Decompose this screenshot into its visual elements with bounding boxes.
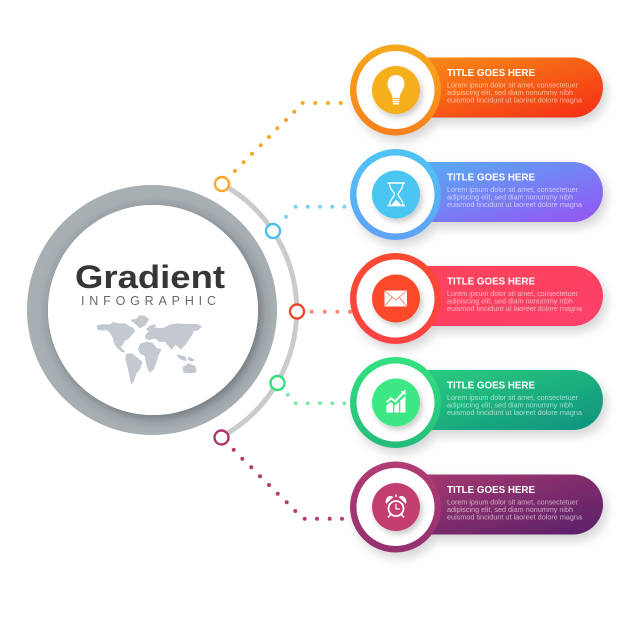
world map <box>97 316 201 383</box>
card 5 body: Lorem ipsum dolor sit amet, consectetuer <box>447 497 579 506</box>
panel: card 1 orange <box>350 44 603 136</box>
node: blue <box>266 224 280 238</box>
connector arc <box>221 184 297 437</box>
card 3 body <box>447 289 583 313</box>
card 1 body: Lorem ipsum dolor sit amet, consectetuer <box>447 80 579 89</box>
card 4 body: adipiscing elit, sed diam nonummy nibh <box>447 400 573 410</box>
card 5 title: TITLE GOES HERE <box>447 485 535 496</box>
icon: envelope <box>384 290 407 306</box>
dotted connector: blue <box>284 205 346 219</box>
card 2 body: Lorem ipsum dolor sit amet, consectetuer <box>447 185 579 194</box>
node: red <box>290 304 304 318</box>
panel: card 3 red <box>350 253 603 344</box>
subheading: INFOGRAPHIC <box>81 294 216 308</box>
node: green <box>270 376 284 390</box>
card 1 body: euismod tincidunt ut laoreet dolore magna <box>447 96 583 105</box>
card 5 body <box>447 497 583 522</box>
card 5 body: adipiscing elit, sed diam nonummy nibh <box>447 505 573 514</box>
card 3 body: adipiscing elit, sed diam nonummy nibh <box>447 296 573 306</box>
card 3 body: euismod tincidunt ut laoreet dolore magna <box>447 304 583 313</box>
card 4 body <box>447 393 583 417</box>
main heading: Gradient <box>75 259 225 295</box>
card 3 body: Lorem ipsum dolor sit amet, consectetuer <box>447 289 579 298</box>
card 2 body: euismod tincidunt ut laoreet dolore magna <box>447 200 583 209</box>
node: purple <box>214 430 228 444</box>
panel: card 5 purple <box>350 462 603 552</box>
node: orange <box>215 177 229 191</box>
card 4 title: TITLE GOES HERE <box>447 380 535 392</box>
card 1 title: TITLE GOES HERE <box>447 68 535 79</box>
dotted connector: green <box>286 393 346 405</box>
card 2 body <box>447 185 583 209</box>
dotted connector: red <box>310 310 352 314</box>
card 3 title: TITLE GOES HERE <box>447 276 535 288</box>
icon: light bulb <box>388 75 404 104</box>
central ring <box>27 185 277 435</box>
icon: alarm clock <box>386 494 406 518</box>
card 1 body: adipiscing elit, sed diam nonummy nibh <box>447 88 573 97</box>
card 4 body: Lorem ipsum dolor sit amet, consectetuer <box>447 393 579 402</box>
card 1 body <box>447 80 583 105</box>
icon: hourglass <box>388 183 405 206</box>
panel: card 4 green <box>350 357 603 448</box>
icon: growth chart <box>386 390 406 412</box>
card 4 body: euismod tincidunt ut laoreet dolore magna <box>447 408 583 417</box>
dotted connector: purple <box>232 448 344 521</box>
card 2 title: TITLE GOES HERE <box>447 172 535 184</box>
panel: card 2 blue <box>350 149 603 240</box>
card 5 body: euismod tincidunt ut laoreet dolore magna <box>447 513 583 522</box>
card 2 body: adipiscing elit, sed diam nonummy nibh <box>447 192 573 202</box>
dotted connector: orange <box>233 101 343 173</box>
